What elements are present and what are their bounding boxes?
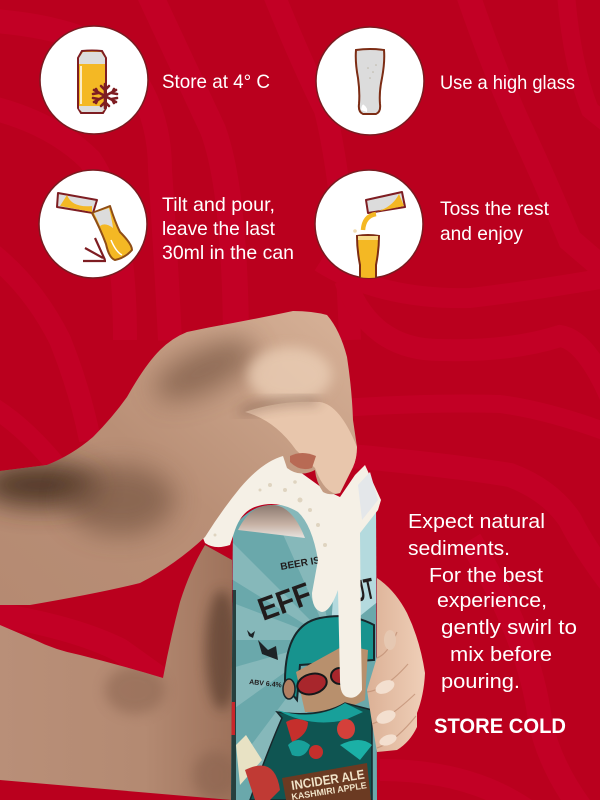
foam: [203, 450, 381, 698]
step text: toss the rest: [440, 198, 550, 245]
text: sediment note: sediments.: [408, 537, 510, 560]
upper hand and forearm: [0, 300, 360, 610]
angle mark: [83, 238, 106, 261]
beer can: INCIDER ALE: [290, 767, 366, 793]
can top: [238, 505, 305, 538]
beer can: UT: [351, 572, 377, 609]
swallows: [247, 630, 278, 660]
can label text: BEER IS: [280, 555, 321, 573]
text: sediment note: mix before: [450, 643, 552, 666]
beer can: IS: [349, 555, 358, 565]
face: [296, 645, 368, 712]
text: sediment note: For the best: [429, 564, 543, 587]
photo: hand opening foaming can: [0, 300, 425, 800]
mountain: [236, 735, 262, 785]
step text: tilt and pour: 30ml in the can: [162, 242, 294, 264]
step text: toss the rest: Toss the rest: [440, 198, 550, 220]
text: sediment note: gently swirl to: [441, 616, 577, 639]
step text: tilt and pour: Tilt and pour,: [162, 194, 275, 216]
step text: tilt and pour: [162, 194, 294, 264]
label plate: [282, 763, 371, 800]
step text: store at 4 C: Store at 4° C: [162, 71, 270, 93]
text: sediment note: pouring.: [441, 670, 520, 693]
beer can: [225, 500, 381, 800]
lower arm and palm: [0, 540, 240, 800]
text: store cold: STORE COLD: [434, 715, 566, 738]
glasses: [296, 672, 328, 696]
text: sediment note: [408, 510, 577, 693]
icon: tilt and pour: [39, 170, 147, 278]
right hand fingers: [367, 578, 425, 752]
glass tilted: [92, 206, 132, 260]
step text: toss the rest: and enjoy: [440, 223, 523, 245]
hair: [285, 616, 374, 700]
text: sediment note: experience,: [437, 589, 547, 612]
icon: toss the rest: [315, 170, 423, 285]
step text: use a high glass: Use a high glass: [440, 72, 575, 94]
icon: can with snowflake: [40, 26, 148, 134]
text: sediment note: Expect natural: [408, 510, 545, 533]
can tilted: [57, 193, 97, 213]
beer can: EFF: [253, 575, 316, 628]
moustache and beard: [250, 703, 372, 800]
icon: high glass: [316, 27, 424, 135]
beer can: ABV 6.4%: [249, 679, 283, 689]
step text: tilt and pour: leave the last: [162, 218, 276, 240]
